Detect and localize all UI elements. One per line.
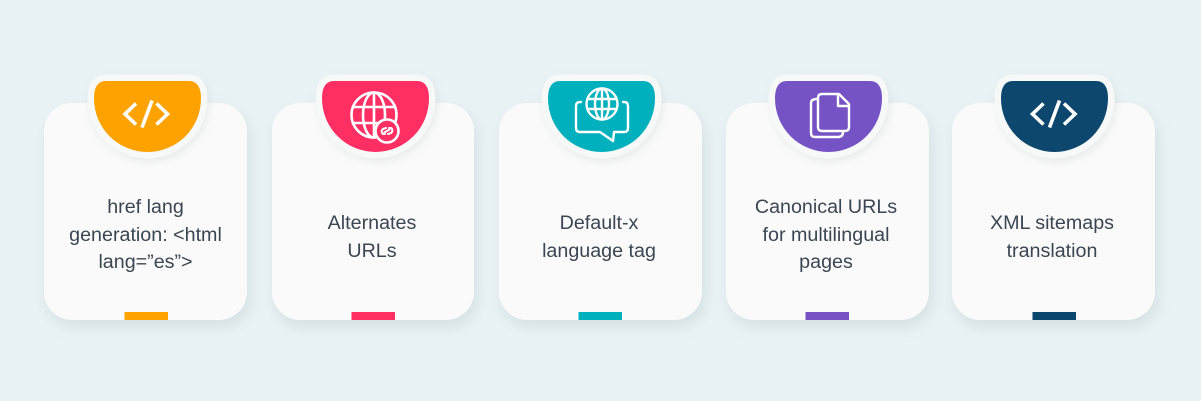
panel: default-x	[499, 81, 702, 320]
text: href lang: generation: <html	[69, 224, 222, 246]
icon: code	[125, 100, 168, 128]
text: href lang: href lang	[107, 196, 184, 218]
badge: pink	[322, 81, 429, 152]
text: href lang: lang=”es”>	[98, 251, 193, 273]
text: canonical: for multilingual	[763, 224, 889, 246]
icon: speech bubble with globe	[576, 88, 628, 141]
panel: canonical URLs	[726, 81, 929, 320]
badge: teal	[548, 81, 655, 152]
accent bar	[1032, 312, 1076, 320]
accent bar	[806, 312, 849, 320]
accent bar	[352, 312, 395, 320]
card background	[44, 103, 247, 320]
icon: code	[1032, 100, 1075, 128]
accent bar	[124, 312, 168, 320]
accent bar	[578, 312, 622, 320]
card background	[272, 103, 474, 320]
badge: purple	[775, 81, 882, 152]
panel: alternates URLs	[272, 81, 474, 320]
card background	[499, 103, 702, 320]
badge: orange	[94, 81, 201, 152]
icon: globe with link	[352, 92, 398, 142]
panel: href lang generation	[44, 81, 247, 320]
text: default-x: Default-x	[560, 212, 639, 234]
text: default-x: language tag	[542, 240, 656, 262]
icon: documents	[811, 94, 849, 137]
text: alternates: URLs	[347, 240, 397, 262]
card background	[952, 103, 1155, 320]
panel: XML sitemaps	[952, 81, 1155, 320]
text: canonical: Canonical URLs	[755, 196, 897, 218]
badge: navy	[1001, 81, 1108, 152]
card background	[726, 103, 929, 320]
text: canonical: pages	[799, 251, 853, 273]
text: XML sitemaps: translation	[1007, 240, 1097, 262]
text: alternates: Alternates	[328, 212, 416, 234]
text: XML sitemaps: XML sitemaps	[990, 212, 1114, 234]
